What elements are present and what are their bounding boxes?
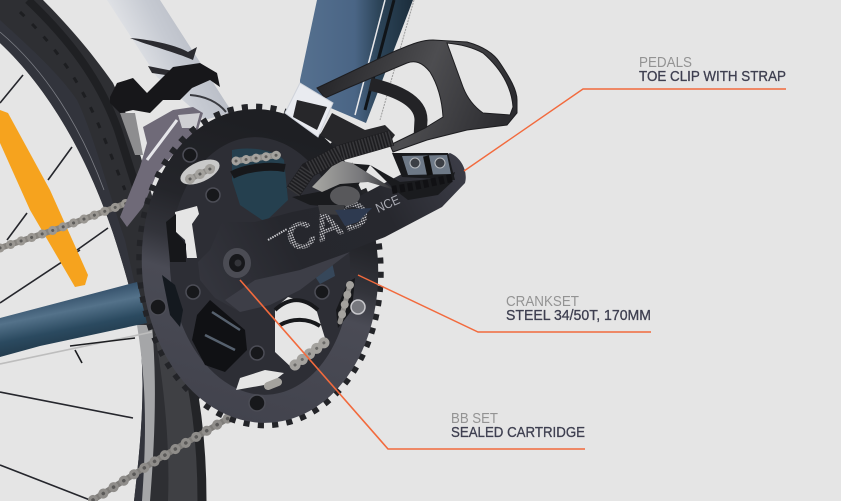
spokes: [0, 75, 133, 500]
crank logo: CAD: [280, 191, 376, 261]
down tube: [0, 282, 152, 364]
callout line: pedals: [464, 89, 786, 171]
upper strap fold: [320, 113, 395, 150]
label: crankset: CRANKSET: [506, 294, 579, 310]
label: pedals: PEDALS: [639, 55, 692, 71]
chain: on the chainring: [190, 155, 350, 386]
label: crankset: STEEL 34/50T, 170MM: [506, 308, 651, 324]
chainring openings: [162, 148, 355, 390]
pedal: [292, 153, 455, 226]
callout line: crankset: [358, 275, 651, 332]
label: bb set: SEALED CARTRIDGE: [451, 425, 585, 441]
crank arm: [198, 153, 466, 312]
blue frame tube: [300, 0, 414, 123]
chain: rear lower run: [93, 416, 232, 500]
crank small lettering: NCE: [373, 192, 402, 216]
strap buckle: [285, 83, 333, 137]
strap loop: [370, 84, 421, 138]
seat tube: [107, 0, 232, 120]
wheel: tyre and rim: [0, 0, 204, 501]
label: bb set: BB SET: [451, 411, 498, 427]
label: pedals: TOE CLIP WITH STRAP: [639, 69, 786, 85]
chainring outer: [131, 101, 389, 431]
label: bb set: [451, 411, 585, 441]
front derailleur: [110, 63, 220, 227]
callout line: bb set: [240, 280, 585, 449]
reflector: [0, 110, 88, 287]
label: pedals: [639, 55, 786, 85]
toe clip: [317, 40, 517, 152]
chainring bolts: [150, 148, 365, 411]
bottom bracket bolt: [223, 248, 251, 278]
chain: rear upper run: [0, 197, 143, 248]
lower strap: [293, 138, 392, 192]
label: crankset: [506, 294, 651, 324]
